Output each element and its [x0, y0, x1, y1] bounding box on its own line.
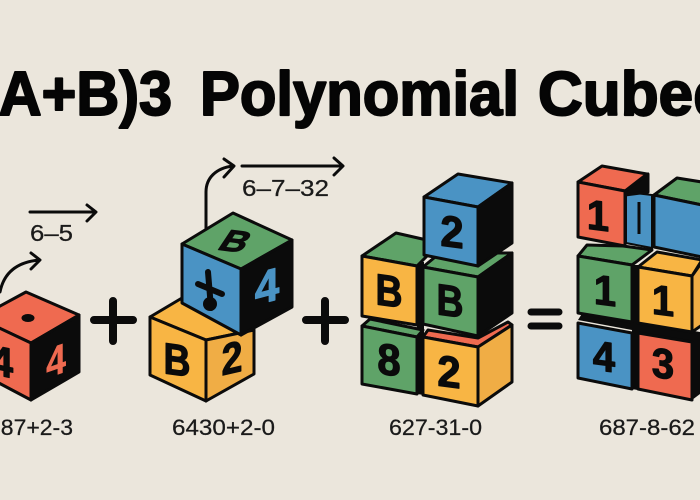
green cube 1	[578, 245, 652, 322]
blue cube segment	[654, 178, 700, 257]
cube: red A	[0, 292, 79, 400]
yellow cube 2: 2	[437, 347, 461, 399]
title	[0, 60, 700, 129]
upper blue cube: 4	[255, 257, 280, 315]
caption: result: 687-8-62	[599, 415, 695, 440]
black backing	[578, 265, 700, 400]
yellow cube B: B	[375, 264, 403, 318]
yellow cube 1	[638, 252, 700, 332]
blue cube 4	[578, 323, 632, 389]
upper blue cube: B	[212, 224, 259, 259]
arrow label: 6-7-32	[242, 158, 343, 201]
green cube 8: 8	[377, 335, 401, 387]
green cube B: B	[436, 274, 464, 328]
operator: plus	[94, 301, 133, 341]
lower yellow cube: 2	[222, 331, 242, 385]
yellow cube 2	[423, 322, 512, 406]
curved arrow from first cube	[0, 253, 40, 292]
stack: result blocks	[578, 166, 700, 400]
blue cube 4: 4	[593, 332, 615, 382]
operator: plus	[306, 301, 345, 341]
stack: four-block tower	[362, 174, 512, 406]
title: Polynomial	[200, 60, 519, 129]
green cube B	[423, 253, 512, 336]
blue cube 2: 2	[440, 207, 464, 259]
stack: yellow and blue cubes	[150, 213, 292, 401]
red cube 1: 1	[587, 191, 609, 241]
lower yellow cube	[150, 298, 254, 401]
curved arrow from second stack	[206, 159, 234, 228]
arrow label: 6-7-32: 6–7–32	[242, 175, 329, 201]
red cube 3: 3	[652, 339, 674, 389]
arrow label: 6-5	[30, 205, 96, 246]
black backing	[417, 262, 424, 395]
red cube 1	[578, 166, 648, 246]
yellow cube 1: 1	[652, 276, 674, 326]
yellow cube B	[362, 233, 440, 325]
arrow label: 6-5: 6–5	[30, 220, 73, 246]
blue narrow block	[626, 192, 652, 248]
red cube 3	[638, 333, 692, 400]
green cube 8	[362, 319, 423, 394]
caption: second term: 6430+2-0	[172, 415, 275, 440]
caption: third term: 627-31-0	[389, 415, 482, 440]
lower yellow cube: B	[163, 333, 191, 387]
green cube 1: 1	[594, 266, 616, 316]
cube: red A: 4	[46, 334, 67, 388]
upper blue cube	[182, 213, 292, 335]
blue cube 2	[424, 174, 512, 266]
operator: equals	[531, 312, 559, 326]
